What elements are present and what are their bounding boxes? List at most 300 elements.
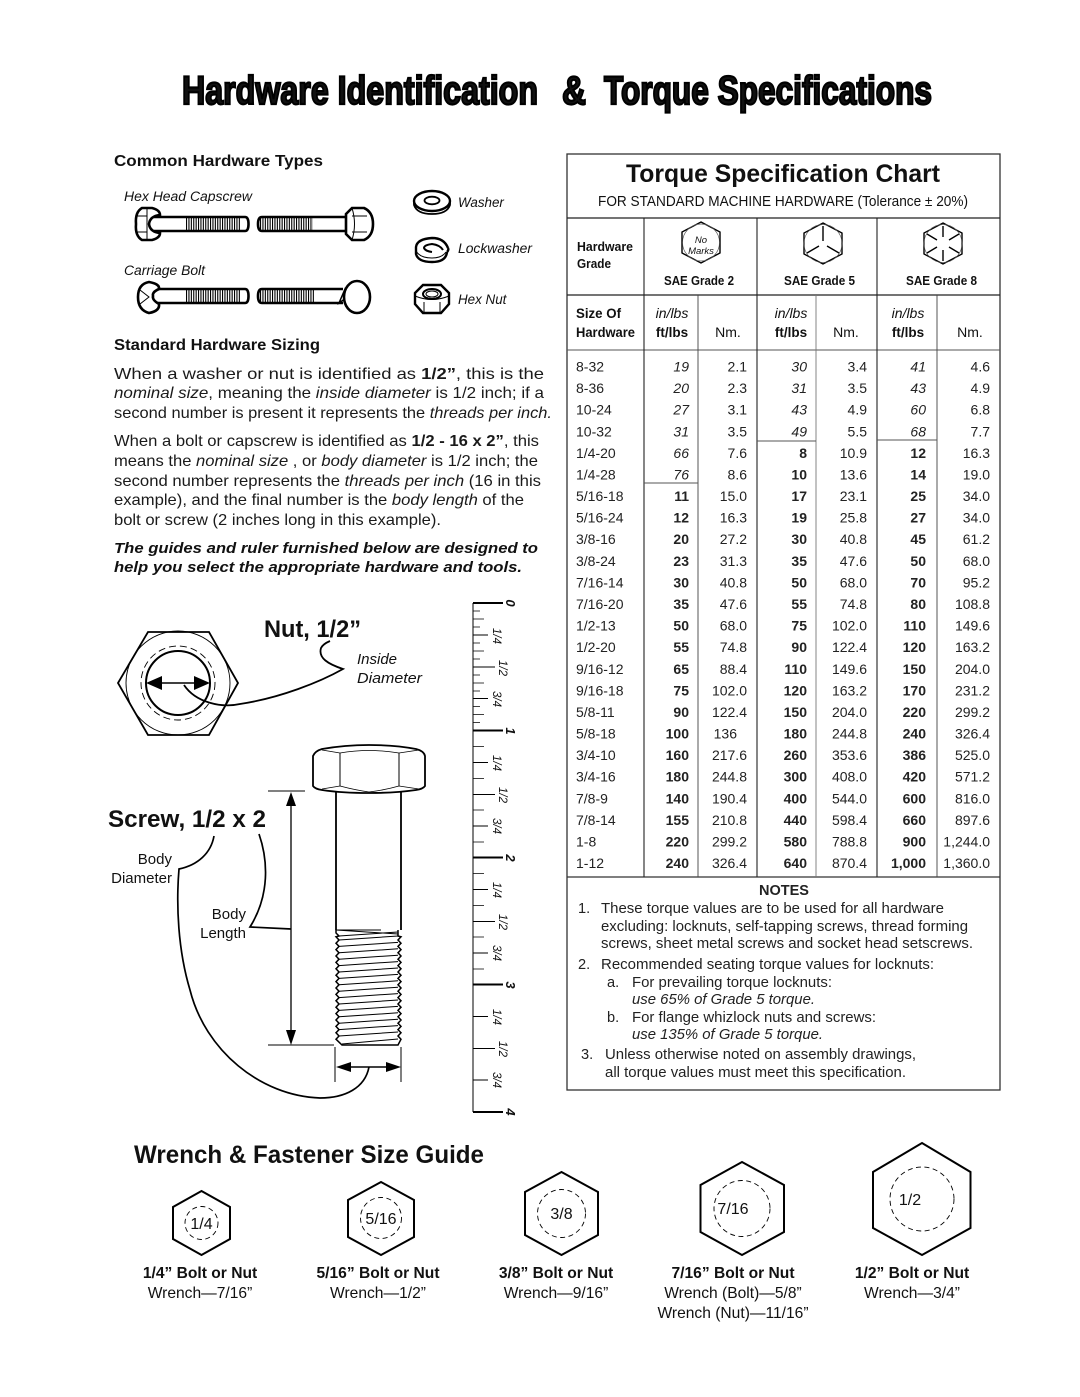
row 5/16-24: 5/16-24 [576,510,624,526]
row 1/2-20: 120 [903,639,926,655]
row 8-36: 8-36 [576,380,604,396]
row 7/16-20: 7/16-20 [576,596,624,612]
row 5/16-24: 12 [673,510,689,526]
heading: standard hardware sizing: Standard Hardware Sizing [114,337,320,354]
row 7/8-14: 660 [903,812,926,828]
row 7/8-9: 7/8-9 [576,790,608,806]
row 3/8-24 [576,553,990,569]
row 3/4-16: 244.8 [712,769,747,785]
text block: washer and nut sizing: nominal size , meaning the inside diameter is 1/2 inch; if a [114,385,544,402]
row 5/8-11: 150 [784,704,807,720]
row 5/8-18: 100 [666,726,689,742]
row 7/16-20 [576,596,990,612]
notes block: excluding: locknuts, self-tapping screws, thread forming [601,919,968,935]
text block: washer and nut sizing: second number is present it represents the threads per inch. [114,405,552,422]
icon: hex nut [415,285,449,313]
row 5/8-18: 136 [714,726,737,742]
leader: body diameter [178,836,369,1098]
row 10-32: 5.5 [848,423,867,439]
row 3/8-16: 3/8-16 [576,531,616,547]
row 5/8-11: 122.4 [712,704,747,720]
ruler fraction labels: 3/4 [490,1072,502,1088]
chart subtitle: FOR STANDARD MACHINE HARDWARE (Tolerance ± 20%) [598,194,968,210]
row 3/8-16: 30 [791,531,807,547]
label: washer: Washer [458,195,504,210]
row 5/8-11: 204.0 [832,704,867,720]
notes block: screws, sheet metal screws and socket head setscrews. [601,936,973,952]
row 8-32: 41 [910,358,926,374]
row 5/16-18: 5/16-18 [576,488,624,504]
ruler [473,599,518,1116]
notes block: 2. [578,957,590,973]
row 1/2-13: 75 [791,618,807,634]
row 3/8-24: 35 [791,553,807,569]
row 1/4-28: 76 [673,466,689,482]
ruler inch labels [503,599,518,1116]
row 8-36 [576,380,990,396]
row 5/16-18: 34.0 [963,488,990,504]
guide item: 1/4 bolt: Wrench—7/16” [148,1285,252,1302]
row 10-32: 31 [673,423,689,439]
text block: bolt and capscrew sizing: second number represents the threads per inch (16 in this [114,473,541,490]
row 3/4-16: 180 [666,769,689,785]
ruler fraction labels: 1/4 [490,628,502,644]
text block: guides note: The guides and ruler furnished below are designed to [114,540,538,557]
row 5/8-11: 299.2 [955,704,990,720]
row 1/2-13: 50 [673,618,689,634]
heading: nut size: Nut, 1/2” [264,616,361,643]
ruler fraction labels: 1/2 [496,660,508,677]
row 1/2-20: 122.4 [832,639,867,655]
label: body diameter: Diameter [111,870,172,887]
ruler fraction labels: 3/4 [490,945,502,961]
row 7/8-14: 155 [666,812,689,828]
row 3/4-16: 3/4-16 [576,769,616,785]
guide item: 7/16 bolt: 7/16” Bolt or Nut [671,1265,795,1282]
row 8-32: 2.1 [728,358,747,374]
row 7/8-14: 440 [784,812,807,828]
row 3/8-24: 3/8-24 [576,553,616,569]
row 3/4-16: 300 [784,769,807,785]
column headers: SAE 8 units: in/lbs [892,305,924,321]
row 3/8-16 [576,531,990,547]
guide item: 7/16 bolt: 7/16 [717,1201,749,1218]
text block: guides note [114,540,538,576]
column headers: SAE 5 units: ft/lbs [775,325,807,340]
row 3/4-16 [576,769,990,785]
row 7/16-14: 70 [910,574,926,590]
row 7/8-9: 600 [903,790,926,806]
row header: hardware grade: Hardware [577,239,633,254]
guide item: 5/16 bolt: Wrench—1/2” [330,1285,426,1302]
row 3/8-16: 45 [910,531,926,547]
row 9/16-18 [576,682,990,698]
notes block: NOTES [759,883,809,899]
row 10-32: 10-32 [576,423,612,439]
row 5/8-18: 180 [784,726,807,742]
row 9/16-12 [576,661,990,677]
row 7/8-9: 140 [666,790,689,806]
row 9/16-18: 9/16-18 [576,682,624,698]
column headers: SAE 2 units [656,305,741,340]
guide item: 1/2 bolt [855,1143,970,1302]
row 1-8: 299.2 [712,834,747,850]
ruler fraction labels: 3/4 [490,818,502,834]
row 5/16-24: 19 [791,510,807,526]
row 3/4-16: 420 [903,769,926,785]
row 1-12: 240 [666,855,689,871]
row 1/2-20: 74.8 [720,639,747,655]
text block: bolt and capscrew sizing [114,433,541,529]
row 7/8-9: 544.0 [832,790,867,806]
row 10-32: 7.7 [971,423,990,439]
row 5/16-18: 11 [674,488,689,504]
notes block: These torque values are to be used for all hardware [601,901,944,917]
row 3/8-16: 20 [673,531,689,547]
row 10-32: 3.5 [728,423,747,439]
label: body length [200,906,246,942]
notes block: For flange whizlock nuts and screws: [632,1010,876,1026]
grade icon: SAE 5 three marks [804,223,842,264]
row header: hardware grade: Grade [577,256,611,271]
column header: size of hardware: Size Of [576,305,621,321]
row 8-36: 2.3 [728,380,747,396]
text block: bolt and capscrew sizing: means the nominal size , or body diameter is 1/2 inch; the [114,453,538,470]
row 1/4-20: 1/4-20 [576,445,616,461]
row 10-24: 60 [910,402,926,418]
column headers: SAE 2 units: ft/lbs [656,325,688,340]
row 7/16-14: 95.2 [963,574,990,590]
row 7/8-14: 7/8-14 [576,812,616,828]
row 8-36: 20 [672,380,689,396]
row 3/8-24: 23 [673,553,689,569]
row 5/8-18 [576,726,990,742]
panel: torque specification chart [567,154,1000,1090]
row 5/8-11: 90 [673,704,689,720]
column headers: SAE 5 units: in/lbs [775,305,807,321]
notes block [578,883,973,1081]
ruler inch labels: 1 [503,727,518,735]
row 10-32: 68 [910,423,926,439]
guide item: 3/8 bolt: 3/8 [550,1206,573,1223]
label: inside diameter [357,651,423,687]
text block: bolt and capscrew sizing: example), and the final number is the body length of the [114,492,524,509]
row 10-24: 27 [672,402,690,418]
row 3/4-10: 386 [903,747,926,763]
ruler fraction labels: 1/2 [496,787,508,804]
label: inside diameter: Inside [357,651,397,668]
column header: size of hardware [576,305,635,340]
row 1-8: 220 [666,834,689,850]
row 1/2-13: 1/2-13 [576,618,616,634]
ruler inch labels: 3 [503,981,518,989]
row 8-32: 30 [791,358,807,374]
row 5/16-18: 23.1 [840,488,867,504]
notes block: b. [607,1010,619,1026]
row 5/8-11: 220 [903,704,926,720]
row 8-32 [576,358,990,374]
row 7/16-14: 50 [791,574,807,590]
row 9/16-18: 231.2 [955,682,990,698]
row 3/4-10: 260 [784,747,807,763]
row 7/16-20: 47.6 [720,596,747,612]
heading: common hardware types: Common Hardware Types [114,153,323,170]
row 5/16-24: 27 [910,510,926,526]
row 1/2-20: 90 [791,639,807,655]
row 10-24: 10-24 [576,402,612,418]
row 7/16-20: 80 [910,596,926,612]
icon: hex head capscrew [136,208,373,240]
row 5/8-18: 240 [903,726,926,742]
row 8-36: 4.9 [971,380,990,396]
row 7/16-20: 35 [673,596,689,612]
row 3/8-16: 27.2 [720,531,747,547]
table rows [576,358,990,871]
ruler fraction labels: 1/4 [490,1009,502,1025]
row 1-12: 1-12 [576,855,604,871]
row 10-24 [576,402,990,418]
ruler inch labels: 2 [503,853,518,862]
row 1/4-28: 10 [791,466,807,482]
heading: screw size: Screw, 1/2 x 2 [108,806,266,833]
row 5/16-18: 17 [791,488,807,504]
title [182,69,932,113]
guide item: 7/16 bolt: Wrench (Bolt)—5/8” [664,1285,802,1302]
panel: hardware illustrations [124,189,533,313]
row 1-8: 1,244.0 [943,834,990,850]
guide item: 1/4 bolt [143,1191,257,1302]
row 1/2-20: 163.2 [955,639,990,655]
row 8-32: 3.4 [848,358,867,374]
guide item: 7/16 bolt: Wrench (Nut)—11/16” [657,1305,809,1322]
guide item: 1/2 bolt: 1/2” Bolt or Nut [855,1265,969,1282]
label: body diameter [111,851,172,887]
row 3/8-24: 50 [910,553,926,569]
row 7/8-14: 210.8 [712,812,747,828]
row 5/16-24: 16.3 [720,510,747,526]
row 7/8-9: 190.4 [712,790,747,806]
row 1/2-13: 102.0 [832,618,867,634]
grade label: SAE 8: SAE Grade 8 [906,274,977,288]
icon: carriage bolt [138,281,370,313]
column headers: SAE 5 units [775,305,859,340]
row 1/4-28: 8.6 [728,466,747,482]
text block: bolt and capscrew sizing: bolt or screw (2 inches long in this example). [114,512,441,529]
arrow: body diameter dimension [335,1047,401,1082]
ruler inch labels: 0 [503,599,518,607]
guide item: 3/8 bolt: 3/8” Bolt or Nut [499,1265,613,1282]
row 3/4-10: 217.6 [712,747,747,763]
title: Hardware Identification [182,69,538,113]
diagram: nut [118,631,343,735]
row 10-24: 6.8 [971,402,990,418]
row 7/16-14: 30 [673,574,689,590]
guide item: 1/2 bolt: Wrench—3/4” [864,1285,960,1302]
row 9/16-18: 170 [903,682,926,698]
notes block: use 135% of Grade 5 torque. [632,1027,823,1043]
row 10-24: 43 [791,402,807,418]
grade label: SAE 2: SAE Grade 2 [664,274,734,288]
heading: wrench and fastener size guide: Wrench & Fastener Size Guide [134,1141,484,1169]
ruler fraction labels [490,628,508,1088]
guide item: 5/16 bolt: 5/16 [365,1211,397,1228]
row 7/16-20: 108.8 [955,596,990,612]
column header: size of hardware: Hardware [576,324,635,340]
row 9/16-12: 65 [673,661,689,677]
row 7/16-20: 55 [791,596,807,612]
ruler inch labels: 4 [503,1107,518,1116]
column headers: SAE 8 units: ft/lbs [892,325,924,340]
row 1-12: 326.4 [712,855,747,871]
notes block: Recommended seating torque values for locknuts: [601,957,934,973]
row 3/8-24: 31.3 [720,553,747,569]
label: lockwasher: Lockwasher [458,241,533,256]
row 1-8: 900 [903,834,926,850]
text block: washer and nut sizing: When a washer or nut is identified as 1/2” , this is the [114,366,544,383]
row 5/8-18: 244.8 [832,726,867,742]
grade icon: SAE 8 six marks [924,223,962,264]
row 9/16-12: 9/16-12 [576,661,624,677]
row 7/16-14: 7/16-14 [576,574,624,590]
row 9/16-18: 163.2 [832,682,867,698]
row 3/4-16: 571.2 [955,769,990,785]
row 9/16-12: 204.0 [955,661,990,677]
row 7/16-14: 40.8 [720,574,747,590]
row 1/2-13: 68.0 [720,618,747,634]
notes block: all torque values must meet this specification. [605,1065,906,1081]
guide item: 5/16 bolt [316,1182,440,1302]
row 10-32: 49 [791,423,807,439]
column headers: SAE 8 units: Nm. [957,324,983,340]
row 1-12: 1,360.0 [943,855,990,871]
label: carriage bolt: Carriage Bolt [124,263,206,278]
row 7/8-14: 598.4 [832,812,867,828]
row 9/16-12: 150 [903,661,926,677]
row 7/8-9: 816.0 [955,790,990,806]
icon: lockwasher [416,238,448,262]
row 7/8-14: 897.6 [955,812,990,828]
row 5/8-11: 5/8-11 [576,704,615,720]
row 1/2-20 [576,639,990,655]
row 1-12 [576,855,990,871]
row 7/16-20: 74.8 [840,596,867,612]
row 1/2-20: 55 [673,639,689,655]
guide item: 3/8 bolt [499,1172,613,1302]
row 5/8-18: 5/8-18 [576,726,616,742]
row 9/16-18: 102.0 [712,682,747,698]
row 10-24: 4.9 [848,402,867,418]
row 9/16-18: 120 [784,682,807,698]
row 5/16-24 [576,510,990,526]
row 3/4-10: 3/4-10 [576,747,616,763]
ruler fraction labels: 1/4 [490,755,502,771]
row 5/16-18: 15.0 [720,488,747,504]
row 8-36: 31 [791,380,807,396]
label: hex nut: Hex Nut [458,292,508,307]
row 8-32: 4.6 [971,358,990,374]
row 1-12: 640 [784,855,807,871]
ruler fraction labels: 1/4 [490,882,502,898]
row 1-8 [576,834,990,850]
row 3/4-10: 160 [666,747,689,763]
row 1/2-20: 1/2-20 [576,639,616,655]
row 1/2-13: 110 [903,618,926,634]
notes block: For prevailing torque locknuts: [632,975,832,991]
row 1/4-20 [576,445,990,461]
row 5/16-18: 25 [910,488,926,504]
notes block: use 65% of Grade 5 torque. [632,992,815,1008]
row 7/16-14 [576,574,990,590]
ruler fraction labels: 1/2 [496,1041,508,1058]
notes block: a. [607,975,619,991]
row 8-36: 3.5 [848,380,867,396]
row 3/4-10: 525.0 [955,747,990,763]
grade icon: SAE 2 no marks: No [695,235,707,246]
guide item: 1/4 bolt: 1/4 [190,1216,213,1233]
label: body length: Body [212,906,246,923]
label: body diameter: Body [138,851,172,868]
row 7/8-9 [576,790,990,806]
guide item: 1/2 bolt: 1/2 [899,1192,921,1209]
arrow: body length dimension [268,791,334,1045]
row 1/4-20: 16.3 [963,445,990,461]
row 8-32: 19 [673,358,689,374]
icon: washer [414,191,450,214]
row 5/16-24: 34.0 [963,510,990,526]
guide item: 7/16 bolt [657,1162,809,1322]
grade icon: SAE 2 no marks [682,222,720,263]
row 1/4-20: 7.6 [728,445,747,461]
grade icon: SAE 2 no marks: Marks [688,246,714,257]
text block: bolt and capscrew sizing: When a bolt or capscrew is identified as 1/2 - 16 x 2” , this [114,433,539,450]
row 3/8-16: 61.2 [963,531,990,547]
row 1-8: 788.8 [832,834,867,850]
text block: washer and nut sizing [114,366,552,422]
row 5/16-18 [576,488,990,504]
grade label: SAE 5: SAE Grade 5 [784,274,855,288]
column headers: SAE 5 units: Nm. [833,324,859,340]
guide item: 1/4 bolt: 1/4” Bolt or Nut [143,1265,257,1282]
ruler fraction labels: 1/2 [496,914,508,931]
chart frame and grid [567,154,1000,1090]
row 1/4-20: 12 [910,445,926,461]
row 1/4-20: 8 [799,445,807,461]
row 8-36: 43 [910,380,926,396]
row 5/8-18: 326.4 [955,726,990,742]
row 3/8-24: 68.0 [963,553,990,569]
row 3/8-24: 47.6 [840,553,867,569]
column headers: SAE 8 units [892,305,983,340]
row 9/16-12: 149.6 [832,661,867,677]
row 1/4-28: 19.0 [963,466,990,482]
row 3/8-16: 40.8 [840,531,867,547]
notes block: 3. [581,1047,593,1063]
guide item: 3/8 bolt: Wrench—9/16” [504,1285,608,1302]
row 10-32 [576,423,990,439]
label: body length: Length [200,925,246,942]
chart title: Torque Specification Chart [626,160,941,188]
row 1/2-13 [576,618,990,634]
row 9/16-12: 110 [784,661,807,677]
leader: body length [250,834,291,929]
label: inside diameter: Diameter [357,670,423,687]
column headers: SAE 2 units: in/lbs [656,305,688,321]
row 1-8: 1-8 [576,834,596,850]
row 8-32: 8-32 [576,358,604,374]
row 3/4-10: 353.6 [832,747,867,763]
row 1-12: 1,000 [891,855,926,871]
row 1/4-28: 1/4-28 [576,466,616,482]
